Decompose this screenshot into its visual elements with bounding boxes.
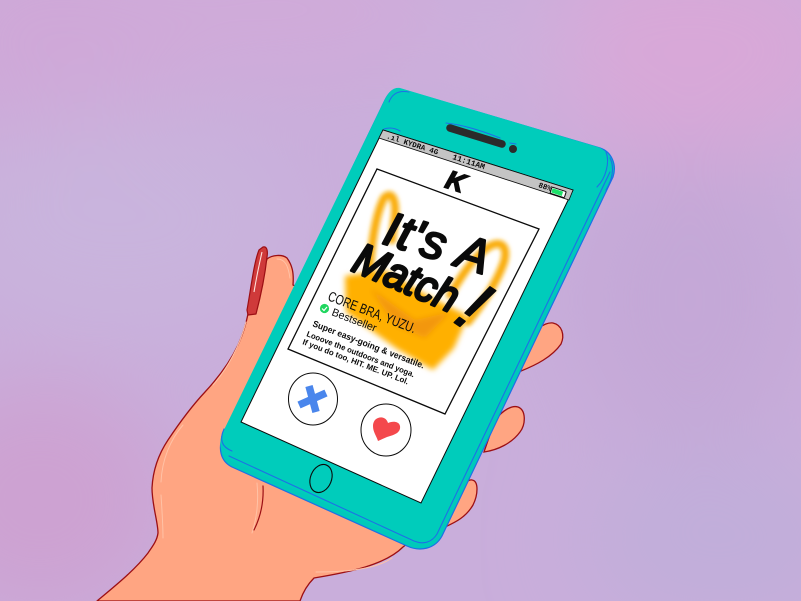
hand: lower right finger: [445, 480, 477, 527]
status: signal and carrier: .ıl KYDRA 4G: [385, 133, 439, 158]
phone: status bar: [379, 130, 573, 200]
hand: middle right finger: [484, 407, 524, 452]
button: like: [361, 404, 411, 456]
status: battery percent: 88%: [537, 182, 553, 194]
product name: CORE BRA, YUZU.: [326, 288, 418, 336]
phone: front body: [220, 88, 610, 543]
icon: green check badge: [320, 304, 329, 313]
card frame: [288, 169, 539, 414]
status: battery icon: [550, 187, 566, 198]
headline: Match!: !: [443, 268, 504, 345]
icon: red heart: [373, 417, 400, 441]
hand: upper right finger: [521, 323, 563, 371]
phone: speaker: [450, 128, 502, 144]
profile card: [288, 169, 539, 414]
hand: skin highlights and crease: [161, 259, 392, 572]
phone: home button: [306, 461, 336, 496]
fingernail: [247, 247, 267, 315]
headline: Match!: Match: [346, 234, 466, 322]
hand: palm and thumb side: [97, 255, 425, 601]
phone: [220, 88, 614, 549]
status: time: 11:11AM: [451, 153, 486, 172]
description line 3: If you do too, HIT. ME. UP. Lol.: [301, 337, 410, 386]
headline: Match!: [346, 234, 504, 345]
description line 2: Looove the outdoors and yoga.: [305, 329, 416, 379]
logo: K: [442, 164, 471, 199]
product image: blurred yellow bra: [345, 195, 505, 370]
icon: blue cross: [299, 386, 326, 412]
button: reject: [288, 373, 338, 425]
phone: back edge: [220, 89, 614, 549]
phone: blue edge highlights: [222, 91, 613, 543]
bestseller label: Bestseller: [330, 307, 378, 335]
description line 1: Super easy-going & versatile.: [311, 319, 426, 371]
phone: screen: [241, 130, 573, 503]
headline: It's A: It's A: [378, 203, 497, 285]
phone: camera: [509, 145, 517, 153]
